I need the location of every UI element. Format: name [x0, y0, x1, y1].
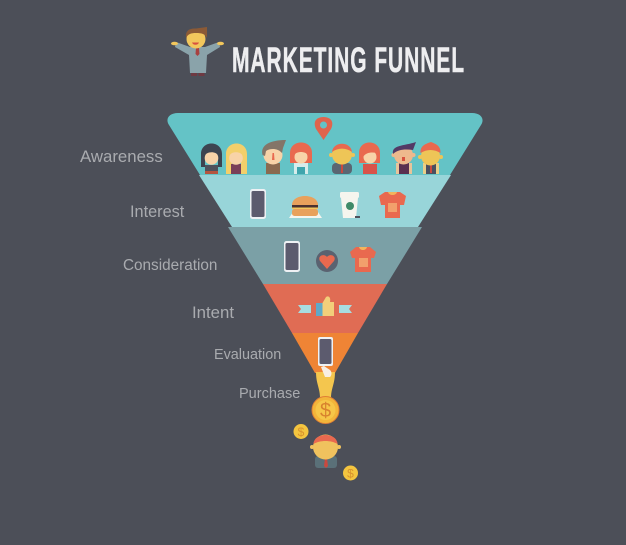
funnel tier: awareness — [167, 113, 483, 175]
person 2 — [226, 144, 247, 174]
icon: t-shirt — [379, 192, 406, 218]
label: Consideration: Consideration — [123, 257, 217, 274]
icon: large dollar coin: $ — [320, 400, 331, 422]
person 1 — [201, 144, 222, 174]
person 7 — [392, 142, 416, 174]
icon: small coin left: $ — [298, 425, 305, 439]
awareness crowd — [201, 140, 443, 174]
icon: presenter man — [171, 27, 224, 76]
icon: location pin — [315, 117, 332, 140]
label: Purchase: Purchase — [239, 386, 300, 402]
funnel neck: purchase — [316, 372, 335, 398]
icon: small coin left — [294, 424, 308, 439]
person 8 — [418, 142, 443, 174]
funnel tier: evaluation — [292, 333, 358, 373]
label: Evaluation: Evaluation — [214, 347, 281, 363]
label: Interest: Interest — [130, 203, 185, 221]
person 4 — [290, 142, 312, 174]
icon: small coin right: $ — [347, 466, 354, 480]
icon: coffee cup — [340, 192, 360, 218]
icon: burger — [289, 196, 322, 218]
icon: phone — [284, 241, 300, 272]
icon: heart badge — [316, 250, 338, 272]
funnel tier: interest — [199, 175, 451, 227]
title: MARKETING FUNNEL — [232, 41, 465, 80]
icon: phone — [250, 189, 266, 219]
label: Awareness: Awareness — [80, 147, 163, 166]
icon: t-shirt — [350, 247, 376, 272]
person 6 — [359, 142, 380, 174]
funnel tier: consideration — [228, 227, 422, 284]
icon: customer — [310, 434, 341, 468]
icon: phone with tapping hand — [318, 337, 333, 377]
person 3 — [262, 140, 286, 174]
icon: small coin right — [343, 466, 358, 480]
icon: large dollar coin — [312, 396, 339, 424]
person 5 — [329, 144, 355, 174]
icon: thumbs up with ribbons — [298, 296, 352, 316]
funnel tier: intent — [263, 284, 387, 333]
label: Intent: Intent — [192, 303, 234, 322]
